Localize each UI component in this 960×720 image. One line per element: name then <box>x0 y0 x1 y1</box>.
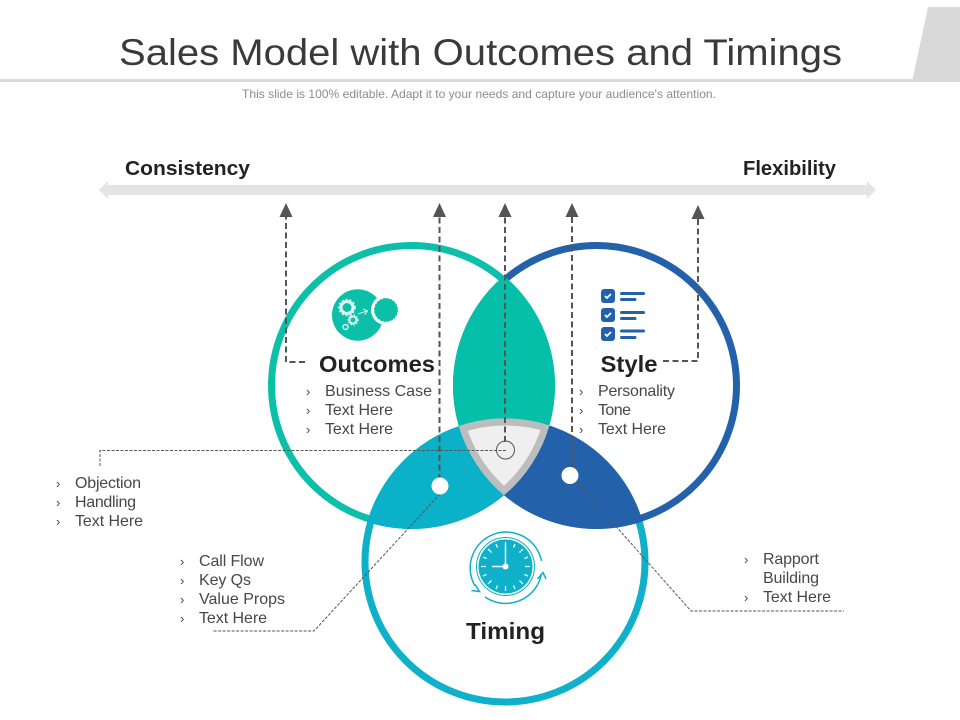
list: style <box>579 383 675 438</box>
list: rapport building: Building <box>763 570 819 587</box>
venn diagram <box>272 246 736 702</box>
list: rapport building: › <box>744 552 748 567</box>
dashed arrow: outcomes to axis <box>280 203 305 362</box>
icon: checklist <box>601 289 645 341</box>
list: style: Personality <box>598 383 675 400</box>
list: call flow: Text Here <box>199 610 267 627</box>
list: style: › <box>579 422 583 437</box>
dashed arrow: centre to axis <box>498 203 512 442</box>
list: rapport building: Text Here <box>763 589 831 606</box>
title: Sales Model with Outcomes and Timings <box>119 32 842 73</box>
list: objection handling: Objection <box>75 475 141 492</box>
list: rapport building <box>744 551 831 606</box>
leader line: call flow <box>212 494 440 631</box>
list: call flow: › <box>180 611 184 626</box>
dashed arrow: outcomes-timing to axis <box>433 203 446 480</box>
ring: timing <box>365 422 645 702</box>
list: outcomes <box>306 383 432 438</box>
list: call flow: Call Flow <box>199 553 264 570</box>
overlap: outcomes and style <box>453 276 555 426</box>
list: call flow <box>180 553 285 627</box>
subtitle: This slide is 100% editable. Adapt it to your needs and capture your audience's attention. <box>242 87 716 101</box>
list: objection handling: Text Here <box>75 513 143 530</box>
header rule and corner tab <box>0 7 960 82</box>
list: call flow: Key Qs <box>199 572 251 589</box>
list: objection handling <box>56 475 143 530</box>
heading: outcomes: Outcomes <box>319 351 435 377</box>
dashed arrow: style to axis <box>663 205 704 361</box>
list: outcomes: Text Here <box>325 402 393 419</box>
list: objection handling: › <box>56 514 60 529</box>
overlap: style and timing <box>504 426 643 529</box>
list: outcomes: Business Case <box>325 383 432 400</box>
icon: gears <box>332 289 401 341</box>
marker: style-timing <box>562 467 578 484</box>
dashed arrow: style-timing to axis <box>566 203 578 470</box>
list: style: › <box>579 403 583 418</box>
list: style: Text Here <box>598 421 666 438</box>
list: call flow: Value Props <box>199 591 285 608</box>
marker: centre <box>496 441 514 459</box>
ring: style <box>456 246 736 526</box>
icon: clock with cycle arrows <box>470 532 546 603</box>
list: call flow: › <box>180 592 184 607</box>
list: outcomes: › <box>306 422 310 437</box>
leader line: objection handling <box>100 450 506 466</box>
marker: outcomes-timing <box>432 478 448 494</box>
list: rapport building: Rapport <box>763 551 820 568</box>
heading: style: Style <box>600 351 658 377</box>
list: rapport building: › <box>744 590 748 605</box>
list: objection handling: › <box>56 476 60 491</box>
list: outcomes: › <box>306 403 310 418</box>
overlap: outcomes and timing <box>367 426 504 529</box>
ring: outcomes <box>272 246 552 526</box>
leader line: rapport building <box>574 479 844 611</box>
list: objection handling: › <box>56 495 60 510</box>
list: outcomes: Text Here <box>325 421 393 438</box>
list: call flow: › <box>180 554 184 569</box>
list: objection handling: Handling <box>75 494 136 511</box>
centre overlap <box>459 418 549 495</box>
axis label: flexibility: Flexibility <box>743 158 837 180</box>
list: outcomes: › <box>306 384 310 399</box>
axis label: consistency: Consistency <box>125 158 251 180</box>
list: style: Tone <box>598 402 631 419</box>
double-headed axis arrow <box>99 181 876 199</box>
heading: timing: Timing <box>466 618 545 644</box>
list: call flow: › <box>180 573 184 588</box>
list: style: › <box>579 384 583 399</box>
